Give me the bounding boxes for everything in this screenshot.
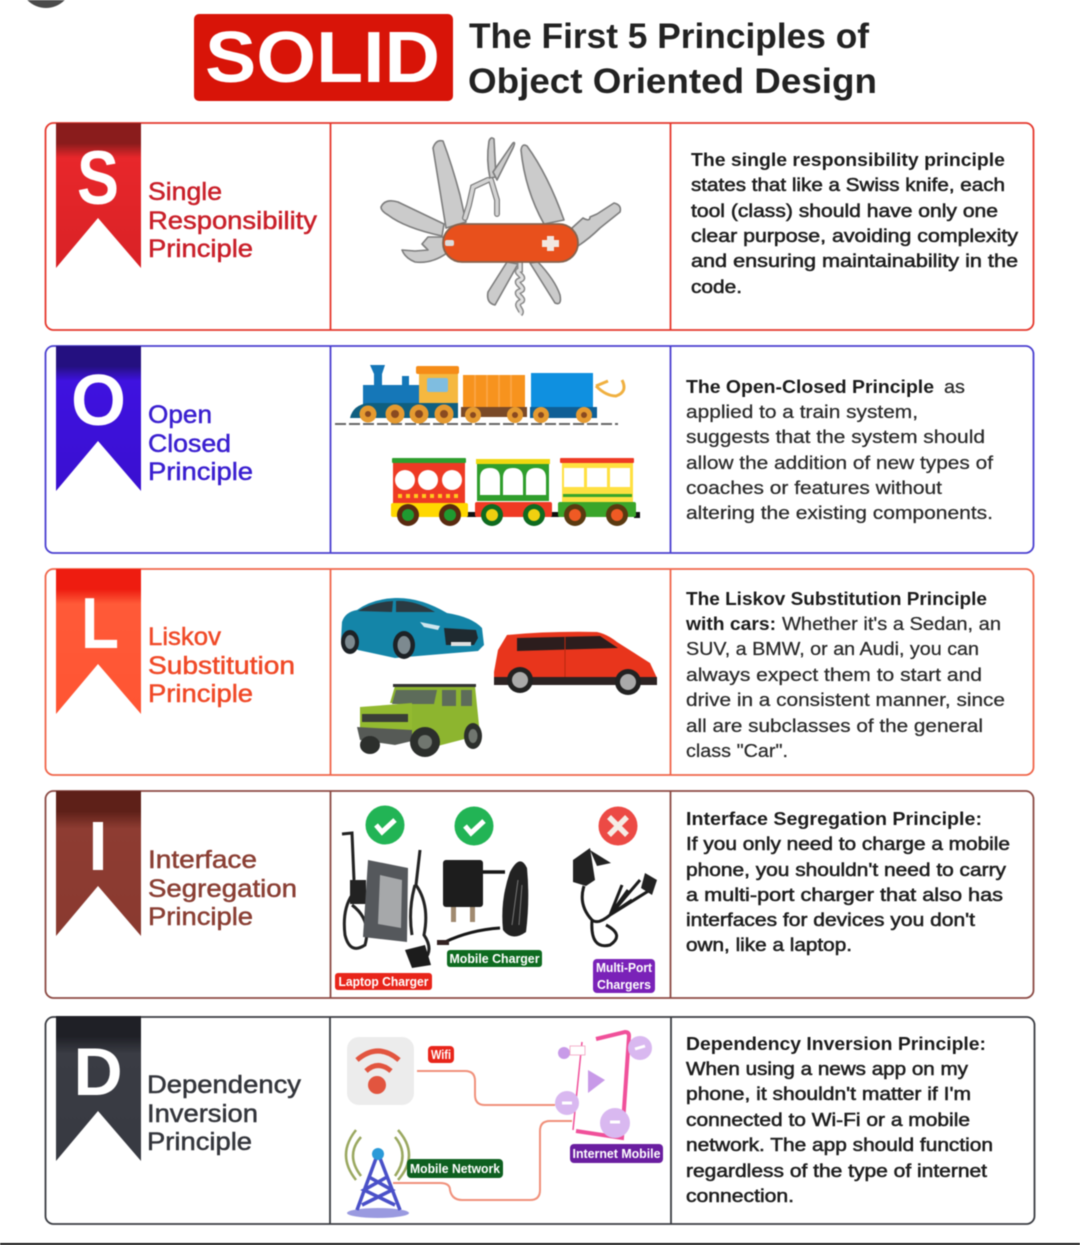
icon: red cross multi-port charger (598, 806, 638, 846)
title: Object Oriented Design (468, 62, 877, 101)
label: single responsibility principle: Responsibility (148, 207, 318, 235)
panel frame (46, 346, 1034, 553)
description: open closed: suggests that the system should (686, 426, 985, 447)
tag: wifi: Wifi (431, 1047, 451, 1062)
label: open closed principle: Principle (148, 458, 253, 486)
description: liskov substitution: Whether it's a Sedan, an (782, 613, 1001, 634)
ribbon D: D (73, 1034, 123, 1110)
panel frame (46, 123, 1034, 330)
label: open closed principle: Open (148, 401, 212, 429)
ribbon S: S (77, 136, 119, 221)
description: interface segregation: a multi-port charger that also has (686, 884, 1003, 905)
label: open closed principle: Closed (148, 430, 231, 458)
tag: multi-port chargers: Chargers (597, 977, 651, 992)
bottom edge bar (0, 1243, 1080, 1245)
illustration: train with locomotive (335, 365, 624, 424)
illustration: blue sedan (341, 598, 484, 659)
description: interface segregation: interfaces for devices you don't (686, 909, 975, 930)
description: dependency inversion: network. The app should function (686, 1134, 993, 1155)
description: single responsibility: clear purpose, avoiding complexity (691, 225, 1019, 246)
panel: O open closed (46, 346, 1034, 553)
panel: I interface segregation (46, 791, 1034, 998)
title: The First 5 Principles of (469, 17, 869, 56)
description: dependency inversion (686, 1033, 993, 1206)
label: dependency inversion principle: Dependency (147, 1071, 302, 1099)
description: single responsibility: The single responsibility principle (691, 149, 1005, 170)
label: liskov substitution principle: Liskov (148, 623, 222, 651)
description: interface segregation: own, like a laptop. (686, 934, 852, 955)
label: liskov substitution principle (148, 623, 295, 708)
description: dependency inversion: When using a news app on my (686, 1058, 969, 1079)
illustration: green suv (357, 684, 482, 757)
panel frame (46, 569, 1034, 775)
icon: smartphone with social bubbles (555, 1032, 652, 1138)
tag: mobile charger: Mobile Charger (450, 951, 540, 966)
description: dependency inversion: connection. (686, 1185, 794, 1206)
label: dependency inversion principle: Inversion (147, 1100, 258, 1128)
header (194, 14, 877, 101)
illustration: swiss knife (381, 138, 620, 314)
label: dependency inversion principle: Principle (147, 1128, 252, 1156)
illustration: multi-port charger (573, 848, 657, 946)
description: liskov substitution (685, 588, 1005, 761)
description: liskov substitution: The Liskov Substitution Principle (686, 588, 987, 609)
panel: L liskov substitution (46, 569, 1034, 775)
connector: mobile network to phone (393, 1121, 572, 1200)
tag: laptop charger: Laptop Charger (338, 974, 428, 989)
panel frame (46, 1017, 1034, 1224)
description: single responsibility (691, 149, 1019, 297)
icon: cell tower (346, 1130, 409, 1218)
description: liskov substitution: class "Car". (686, 740, 788, 761)
avatar fragment at top (20, 0, 72, 8)
ribbon D (56, 1016, 141, 1161)
description: liskov substitution: all are subclasses of the general (686, 715, 983, 736)
description: open closed (686, 376, 994, 523)
description: liskov substitution: with cars: (685, 613, 776, 634)
ribbon I: I (88, 807, 108, 885)
panel frame (46, 791, 1034, 998)
label: dependency inversion principle (147, 1071, 302, 1156)
illustration: red hatchback (494, 632, 657, 695)
description: open closed: The Open-Closed Principle (686, 376, 934, 397)
tag: mobile network: Mobile Network (410, 1161, 501, 1176)
icon: green check laptop charger (366, 806, 404, 844)
description: interface segregation: phone, you shouldn't need to carry (686, 859, 1007, 880)
icon: green check mobile charger (454, 806, 494, 846)
description: single responsibility: tool (class) should have only one (691, 200, 998, 221)
ribbon O: O (71, 361, 126, 441)
ribbon S (56, 123, 141, 268)
ribbon O (56, 346, 141, 491)
description: single responsibility: states that like a Swiss knife, each (691, 174, 1005, 195)
description: dependency inversion: Dependency Inversion Principle: (686, 1033, 986, 1054)
label: open closed principle (148, 401, 253, 486)
description: liskov substitution: SUV, a BMW, or an Audi, you can (686, 638, 979, 659)
label: interface segregation principle: Principle (148, 903, 253, 931)
label: liskov substitution principle: Substitution (148, 652, 295, 680)
SOLID badge: SOLID (205, 18, 440, 98)
description: dependency inversion: regardless of the type of internet (686, 1160, 987, 1181)
icon: wifi tile (347, 1037, 414, 1105)
ribbon L: L (81, 584, 119, 664)
description: interface segregation (686, 808, 1010, 955)
description: open closed: altering the existing components. (686, 502, 993, 523)
description: open closed: coaches or features without (686, 477, 942, 498)
ribbon L (56, 569, 141, 714)
description: liskov substitution: always expect them to start and (686, 664, 982, 685)
description: single responsibility: code. (691, 276, 742, 297)
description: interface segregation: If you only need to charge a mobile (686, 833, 1010, 854)
ribbon I (56, 791, 141, 936)
title (468, 17, 877, 101)
tag: multi-port chargers: Multi-Port (596, 960, 653, 975)
tag: multi-port chargers (593, 959, 655, 993)
tag: internet mobile: Internet Mobile (572, 1146, 660, 1161)
description: liskov substitution: drive in a consistent manner, since (686, 689, 1005, 710)
panel: D dependency inversion (46, 1016, 1034, 1224)
label: interface segregation principle (148, 846, 297, 931)
description: single responsibility: and ensuring maintainability in the (691, 250, 1018, 271)
label: liskov substitution principle: Principle (148, 680, 253, 708)
illustration: mobile charger (437, 860, 528, 945)
illustration: laptop charger (342, 833, 431, 968)
description: interface segregation: Interface Segregation Principle: (686, 808, 982, 829)
label: interface segregation principle: Interface (148, 846, 257, 874)
description: open closed: applied to a train system, (686, 401, 918, 422)
illustration: added coaches (391, 458, 640, 526)
description: dependency inversion: connected to Wi-Fi or a mobile (686, 1109, 970, 1130)
label: interface segregation principle: Segregation (148, 875, 297, 903)
label: single responsibility principle (148, 178, 318, 263)
description: open closed: allow the addition of new types of (686, 452, 994, 473)
description: open closed: as (944, 376, 965, 397)
panel: S single responsibility (46, 123, 1034, 330)
connector: wifi to phone (417, 1071, 555, 1105)
description: dependency inversion: phone, it shouldn't matter if I'm (686, 1083, 971, 1104)
label: single responsibility principle: Principle (148, 235, 253, 263)
label: single responsibility principle: Single (148, 178, 222, 206)
